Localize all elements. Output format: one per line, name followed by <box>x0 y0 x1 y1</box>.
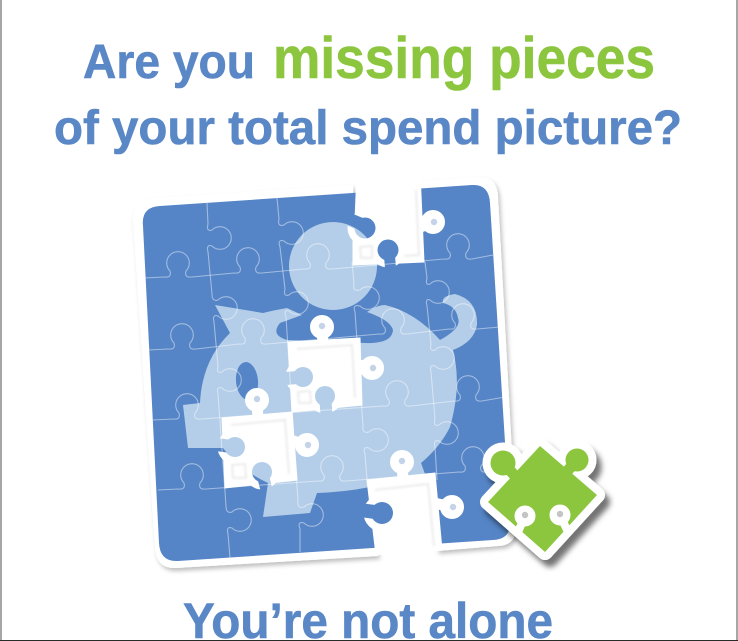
puzzle board <box>130 172 597 570</box>
gap: centre lower <box>218 388 318 489</box>
blue board with piggy bank artwork <box>142 185 509 561</box>
green puzzle piece <box>488 446 597 552</box>
gap inner shading <box>231 190 434 546</box>
gap: centre upper <box>286 316 384 413</box>
gap: bottom <box>364 450 464 555</box>
title line two: of your total spend picture? <box>54 102 682 155</box>
icon: piggy bank <box>183 294 477 517</box>
title <box>54 26 682 155</box>
puzzle seam lines <box>145 198 510 558</box>
title line one <box>83 26 655 91</box>
piece white notches <box>515 505 570 532</box>
piece white border and shadow <box>488 446 597 552</box>
missing piece gaps <box>218 172 464 555</box>
icon: coin <box>289 222 377 310</box>
title line one: Are you <box>83 36 255 89</box>
knob centre dots <box>254 219 456 510</box>
piece green body <box>488 446 597 552</box>
gap: top <box>348 186 445 268</box>
board white frame <box>133 177 516 568</box>
title line one: missing pieces <box>273 26 655 91</box>
